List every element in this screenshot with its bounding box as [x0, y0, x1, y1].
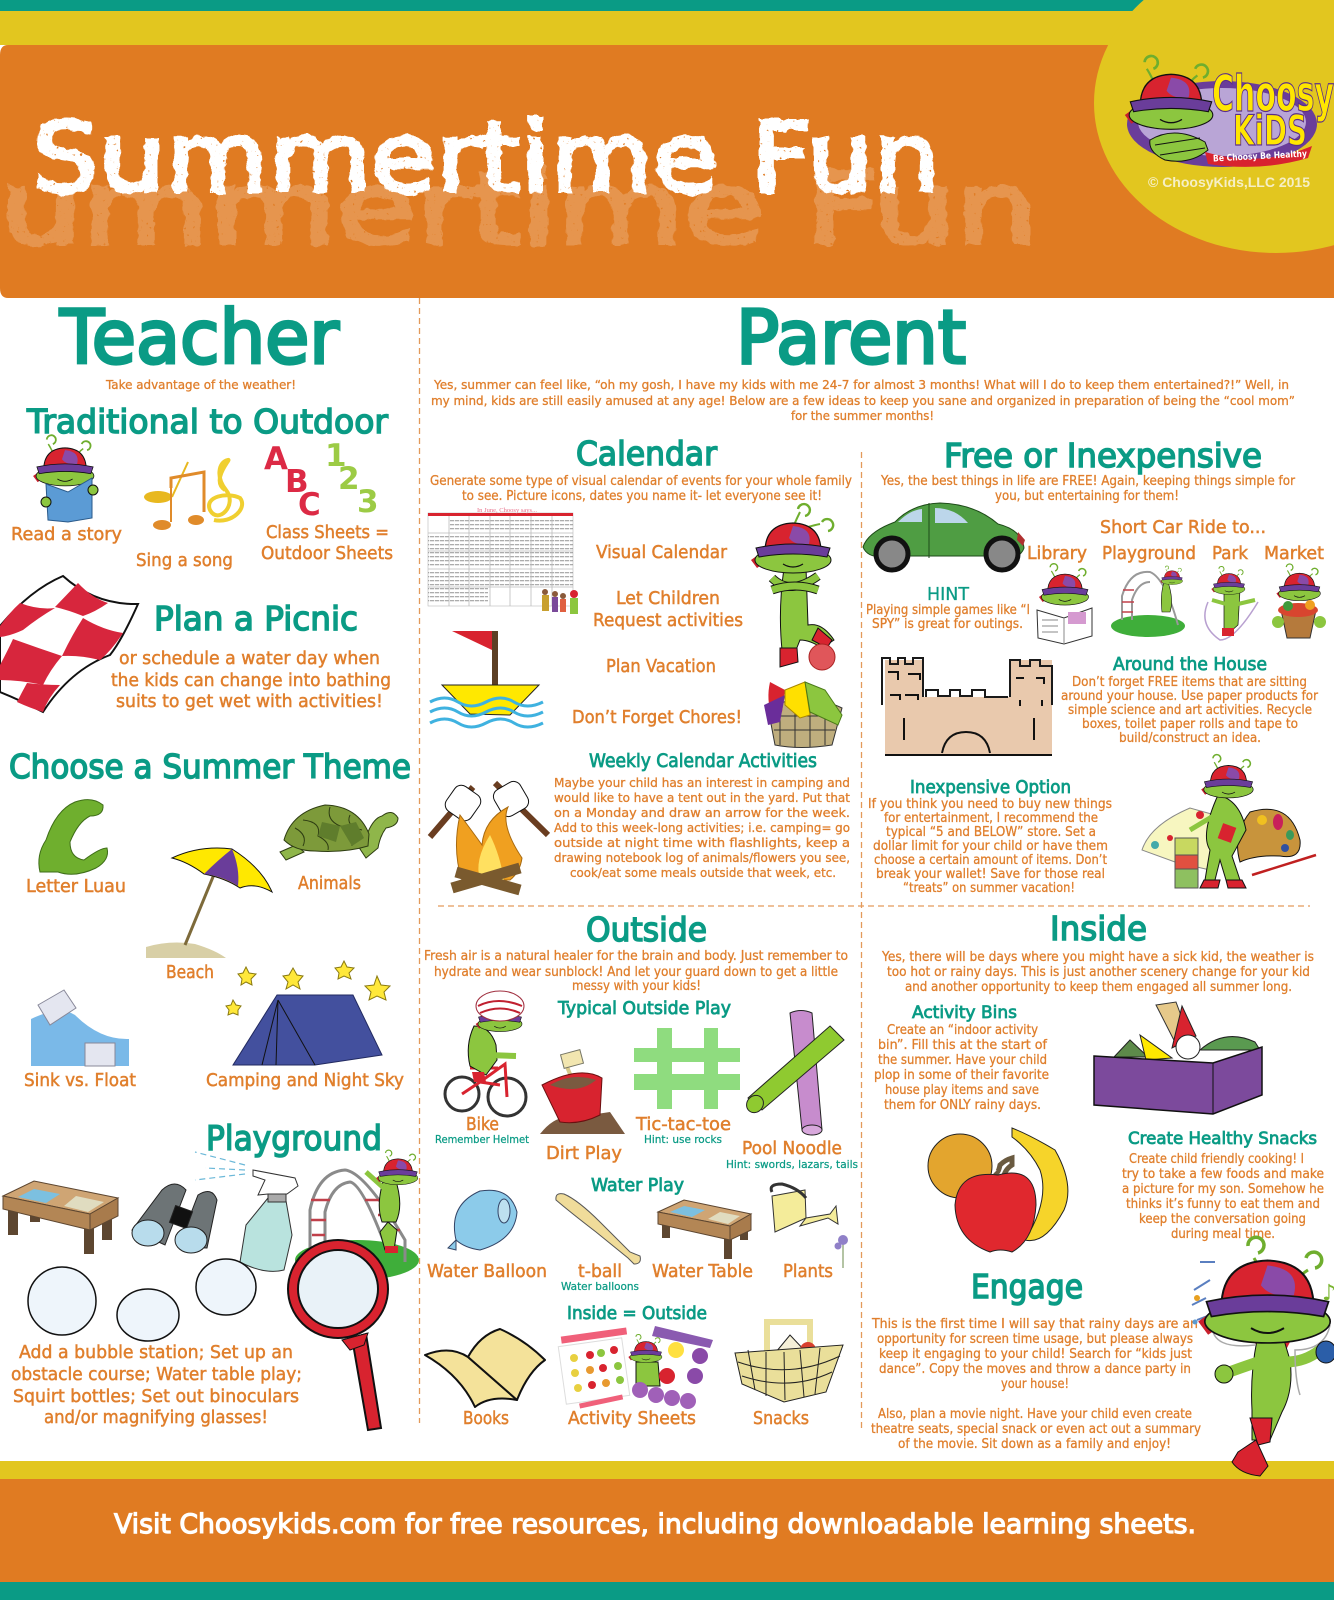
icon: jump rope mascot [1205, 566, 1258, 640]
text: around the house: simple science and art activities. Recycle [1068, 703, 1312, 718]
teal footer band [0, 1582, 1334, 1600]
icon: green car [863, 503, 1025, 570]
text: healthy snacks: during meal time. [1171, 1227, 1275, 1242]
text: around the house: build/construct an idea. [1119, 731, 1261, 746]
heading: water play: Water Play [591, 1175, 684, 1196]
heading: inside equals outside: Inside = Outside [567, 1303, 707, 1324]
heading: Teacher: Teacher [59, 295, 340, 381]
icon: fruit [928, 1128, 1068, 1252]
text: free intro [880, 474, 1296, 504]
icon: stars [226, 961, 390, 1015]
text: inexpensive option: break your wallet! Save for those real [876, 867, 1105, 882]
text: engage: keep it engaging to your child! Search for “kids just [879, 1347, 1192, 1362]
text: engage: of the movie. Sit down as a family and enjoy! [898, 1437, 1171, 1452]
text: activity bins: them for ONLY rainy days. [884, 1098, 1041, 1113]
subtitle: Take advantage of the weather! [105, 378, 296, 392]
text: healthy snacks: keep the conversation going [1139, 1212, 1306, 1227]
label: class sheets [261, 522, 393, 564]
label: bike: Bike [466, 1114, 499, 1135]
heading: engage: Engage [971, 1267, 1083, 1306]
text: intro [431, 378, 1295, 423]
icon: market mascot [1272, 564, 1326, 638]
icon: pool noodles [743, 1010, 844, 1135]
text: hint: SPY” is great for outings. [872, 617, 1023, 632]
label: visual calendar: Visual Calendar [596, 542, 728, 563]
text: activity bins: bin”. Fill this at the start of [878, 1038, 1047, 1053]
icon: music notes [144, 460, 242, 530]
label: library: Library [1027, 543, 1087, 564]
text: calendar intro [430, 474, 852, 504]
icon: sink vs float [31, 990, 129, 1066]
text: inexpensive option: choose a certain amount of items. Don’t [874, 853, 1107, 868]
label: animals: Animals [298, 873, 361, 894]
icon: watering can [771, 1184, 848, 1268]
icon: campfire with marshmallows [430, 779, 548, 890]
text: activity bins: the summer. Have your child [878, 1053, 1047, 1068]
text: healthy snacks: thinks it’s funny to eat them and [1126, 1197, 1320, 1212]
label: t-ball: t-ball [578, 1261, 622, 1282]
icon: letters and numbers: 3 [357, 484, 379, 520]
text: weekly calendar: would like to have a tent out in the yard. Put that [554, 791, 850, 805]
heading: weekly calendar activities: Weekly Calendar Activities [589, 750, 817, 772]
panel: inside [871, 909, 1324, 1452]
label: sink vs float: Sink vs. Float [24, 1070, 136, 1091]
icon: letters and numbers: B [285, 464, 309, 500]
text: healthy snacks: try to take a few foods and make [1122, 1167, 1324, 1182]
text: playground: Squirt bottles; Set out binoculars [13, 1386, 299, 1407]
text: calendar intro: to see. Picture icons, dates you name it- let everyone see it! [462, 489, 822, 504]
label: let children request: Request activities [593, 610, 743, 631]
logo ribbon [1205, 146, 1312, 167]
heading: hint: HINT [927, 584, 970, 605]
panel: free or inexpensive [863, 436, 1326, 896]
text: inside intro: too hot or rainy days. This is just another scenery change for your kid [887, 965, 1310, 980]
icon: letters and numbers: 2 [338, 461, 360, 497]
text: inexpensive option: typical “5 and BELOW” store. Set a [886, 825, 1096, 840]
text: weekly calendar: outside at night time with flashlights, keep a [554, 836, 850, 850]
text: free intro: you, but entertaining for them! [995, 489, 1179, 504]
icon: playground mascot [1111, 566, 1185, 637]
icon: snack basket [735, 1322, 843, 1402]
text: weekly calendar: on a Monday and draw an arrow for the week. [554, 806, 850, 820]
text: picnic: suits to get wet with activities! [116, 691, 383, 712]
text: around the house: around your house. Use paper products for [1061, 689, 1319, 704]
label: books: Books [463, 1408, 509, 1429]
label: letter luau: Letter Luau [26, 876, 126, 897]
text: engage: theatre seats, special snack or even act out a summary [871, 1422, 1201, 1437]
panel: logo badge [1094, 0, 1334, 253]
icon: binoculars [132, 1184, 217, 1253]
text: weekly calendar: cook/eat some meals outside that week, etc. [570, 866, 836, 880]
icon: letters and numbers: 1 [325, 438, 347, 474]
text: inexpensive option: If you think you need to buy new things [868, 797, 1112, 812]
text: activity bins [874, 1023, 1049, 1113]
text: intro: Yes, summer can feel like, “oh my gosh, I have my kids with me 24-7 for almost 3 months! What will I do to keep them entertained?!” Well, in [433, 378, 1289, 392]
text: inside intro [881, 950, 1314, 995]
logo mascot [1125, 56, 1213, 161]
panel: outside [424, 910, 858, 1429]
text: activity bins: Create an “indoor activity [887, 1023, 1038, 1038]
heading: Parent: Parent [736, 295, 966, 381]
image: visual calendar sheet: In June, Choosy says... [477, 508, 538, 514]
text: around the house: boxes, toilet paper rolls and tape to [1082, 717, 1298, 732]
icon: tent [233, 995, 382, 1065]
text: picnic: the kids can change into bathing [111, 670, 391, 691]
text: picnic [111, 648, 391, 712]
text: playground: Add a bubble station; Set up an [19, 1342, 293, 1363]
icon: letters and numbers: C [298, 487, 321, 523]
text: weekly calendar: Add to this week-long activities; i.e. camping= go [554, 821, 850, 835]
icon: laundry basket [764, 682, 842, 748]
text: outside intro: messy with your kids! [572, 979, 701, 994]
copyright: © ChoosyKids,LLC 2015 [1148, 175, 1311, 190]
heading: activity bins: Activity Bins [912, 1003, 1017, 1023]
heading: inside: Inside [1050, 909, 1147, 948]
yellow band [0, 0, 1334, 45]
note: helmet: Remember Helmet [435, 1133, 530, 1146]
logo oval [1127, 81, 1317, 167]
panel: title banner [0, 45, 1334, 298]
yellow ellipse [1094, 0, 1334, 253]
text: intro: for the summer months! [791, 409, 934, 423]
text: free intro: Yes, the best things in life are FREE! Again, keeping things simple for [880, 474, 1296, 489]
text: outside intro: hydrate and wear sunblock! And let your guard down to get a little [434, 965, 838, 980]
text: weekly calendar: drawing notebook log of animals/flowers you see, [554, 851, 850, 865]
text: outside intro: Fresh air is a natural healer for the brain and body. Just remember to [424, 949, 848, 964]
text: engage [871, 1317, 1201, 1452]
icon: beach umbrella [146, 848, 272, 958]
panel: footer [0, 1461, 1334, 1600]
icon: magnifying glass [288, 1240, 388, 1430]
label: class sheets: Class Sheets = [266, 522, 389, 543]
column dividers [420, 298, 1310, 1428]
icon: letters and numbers [264, 438, 379, 523]
logo ribbon text: Be Choosy Be Healthy [1213, 150, 1307, 164]
icon: open book [425, 1329, 545, 1407]
icon: reading mascot [33, 435, 98, 522]
text: healthy snacks [1122, 1152, 1324, 1242]
yellow footer band [0, 1461, 1334, 1479]
icon: picnic blanket [0, 576, 138, 712]
panel: calendar [428, 434, 852, 890]
text: engage: opportunity for screen time usage, but please always [877, 1332, 1193, 1347]
text: engage: Also, plan a movie night. Have your child even create [878, 1407, 1192, 1422]
text: outside intro [424, 949, 848, 994]
text: around the house [1061, 675, 1319, 746]
text: hint: Playing simple games like “I [866, 603, 1030, 618]
orange banner [0, 45, 1334, 298]
label: dirt play: Dirt Play [546, 1143, 622, 1164]
label: market: Market [1264, 543, 1324, 564]
heading: inexpensive option: Inexpensive Option [910, 777, 1071, 798]
icon: spray bottle [195, 1152, 298, 1271]
text: inside intro: Yes, there will be days where you might have a sick kid, the weather is [881, 950, 1314, 965]
text: activity bins: plop in some of their favorite [874, 1068, 1049, 1083]
label: short car ride: Short Car Ride to... [1100, 517, 1266, 538]
text: engage: your house! [1001, 1377, 1069, 1392]
icon: tic tac toe [634, 1028, 740, 1109]
text: engage: dance”. Copy the moves and throw a dance party in [879, 1362, 1191, 1377]
icon: letters and numbers: A [264, 441, 288, 477]
note: water balloons: Water balloons [561, 1280, 639, 1293]
heading: around the house: Around the House [1113, 654, 1267, 675]
title shadow: ummertime Fun [0, 150, 1038, 267]
label: plants: Plants [783, 1261, 833, 1282]
text: hint [866, 603, 1030, 632]
text: inexpensive option: dollar limit for your child or have them [873, 839, 1108, 854]
icon: turtle [280, 805, 398, 860]
text: around the house: Don’t forget FREE items that are sitting [1072, 675, 1307, 690]
label: let children request: Let Children [616, 588, 720, 609]
icon: baseball bat [556, 1194, 640, 1264]
icon: water balloon [448, 1190, 517, 1250]
text: calendar intro: Generate some type of visual calendar of events for your whole family [430, 474, 852, 489]
text: playground [11, 1342, 302, 1428]
footer text: Visit Choosykids.com for free resources, including downloadable learning sheets. [114, 1509, 1196, 1540]
label: beach: Beach [166, 962, 214, 983]
text: playground: and/or magnifying glasses! [44, 1407, 268, 1428]
label: tic-tac-toe: Tic-tac-toe [635, 1114, 731, 1135]
text: inexpensive option [868, 797, 1112, 896]
heading: free or inexpensive: Free or Inexpensive [944, 436, 1262, 475]
image: activity sheets [558, 1326, 713, 1409]
heading: Calendar: Calendar [576, 434, 717, 473]
icon: library mascot [1037, 564, 1092, 644]
top teal strip [0, 0, 1145, 11]
icon: bubbles [28, 1259, 256, 1341]
icon: climbing mascot [295, 1150, 419, 1280]
text: weekly calendar: Maybe your child has an interest in camping and [554, 776, 850, 790]
label: plan vacation: Plan Vacation [606, 656, 716, 677]
image: visual calendar sheet [428, 508, 578, 614]
label: read a story: Read a story [11, 524, 122, 545]
icon: water table [658, 1200, 751, 1259]
icon: cardboard castle [882, 658, 1052, 755]
orange footer band [0, 1479, 1334, 1582]
heading: outside: Outside [586, 910, 707, 949]
text: weekly calendar [554, 776, 850, 880]
heading: Playground: Playground [206, 1119, 382, 1159]
text: engage: This is the first time I will say that rainy days are an [871, 1317, 1198, 1332]
heading: Traditional to Outdoor: Traditional to Outdoor [26, 402, 388, 441]
panel: teacher [0, 295, 419, 1430]
label: activity sheets: Activity Sheets [568, 1408, 696, 1429]
text: inexpensive option: “treats” on summer vacation! [903, 881, 1075, 896]
heading: typical outside play: Typical Outside Play [557, 998, 731, 1019]
text: intro: my mind, kids are still easily amused at any age! Below are a few ideas to keep you sane and organized in preparation of being the “cool mom” [431, 394, 1295, 408]
title: Summertime Fun [32, 102, 940, 214]
icon: green letter C [39, 800, 108, 874]
icon: art mascot [1142, 755, 1316, 888]
label: class sheets: Outdoor Sheets [261, 543, 393, 564]
note: rocks: Hint: use rocks [644, 1133, 722, 1146]
label: park: Park [1212, 543, 1249, 564]
label: let children request [593, 588, 743, 631]
icon: dirt bucket [540, 1050, 625, 1134]
label: chores: Don’t Forget Chores! [572, 707, 742, 728]
label: water table: Water Table [652, 1261, 753, 1282]
heading: Choose a Summer Theme: Choose a Summer Theme [9, 747, 411, 786]
logo oval inner [1138, 88, 1306, 156]
label: playground: Playground [1102, 543, 1196, 564]
heading: create healthy snacks: Create Healthy Snacks [1128, 1129, 1317, 1149]
label: sing a song: Sing a song [136, 550, 233, 571]
text: inside intro: and another opportunity to keep them engaged all summer long. [905, 980, 1292, 995]
text: inexpensive option: for entertainment, I recommend the [884, 811, 1098, 826]
label: pool noodle: Pool Noodle [742, 1138, 842, 1159]
icon: purple activity bin [1094, 1002, 1262, 1114]
note: noodle hint: Hint: swords, lazars, tails [726, 1158, 858, 1171]
label: water balloon: Water Balloon [427, 1261, 547, 1282]
text: playground: obstacle course; Water table play; [11, 1364, 302, 1385]
text: activity bins: house play items and save [885, 1083, 1039, 1098]
label: snacks: Snacks [753, 1408, 809, 1429]
icon: mascot with ball [751, 504, 835, 670]
heading: Plan a Picnic: Plan a Picnic [154, 599, 358, 638]
text: picnic: or schedule a water day when [119, 648, 380, 669]
text: healthy snacks: Create child friendly cooking! I [1129, 1152, 1304, 1167]
panel: parent intro [431, 295, 1295, 423]
icon: sailboat [430, 631, 543, 727]
label: camping: Camping and Night Sky [206, 1070, 404, 1091]
icon: bike mascot [445, 991, 526, 1116]
icon: dancing mascot [1192, 1237, 1334, 1476]
icon: water table [3, 1181, 118, 1254]
